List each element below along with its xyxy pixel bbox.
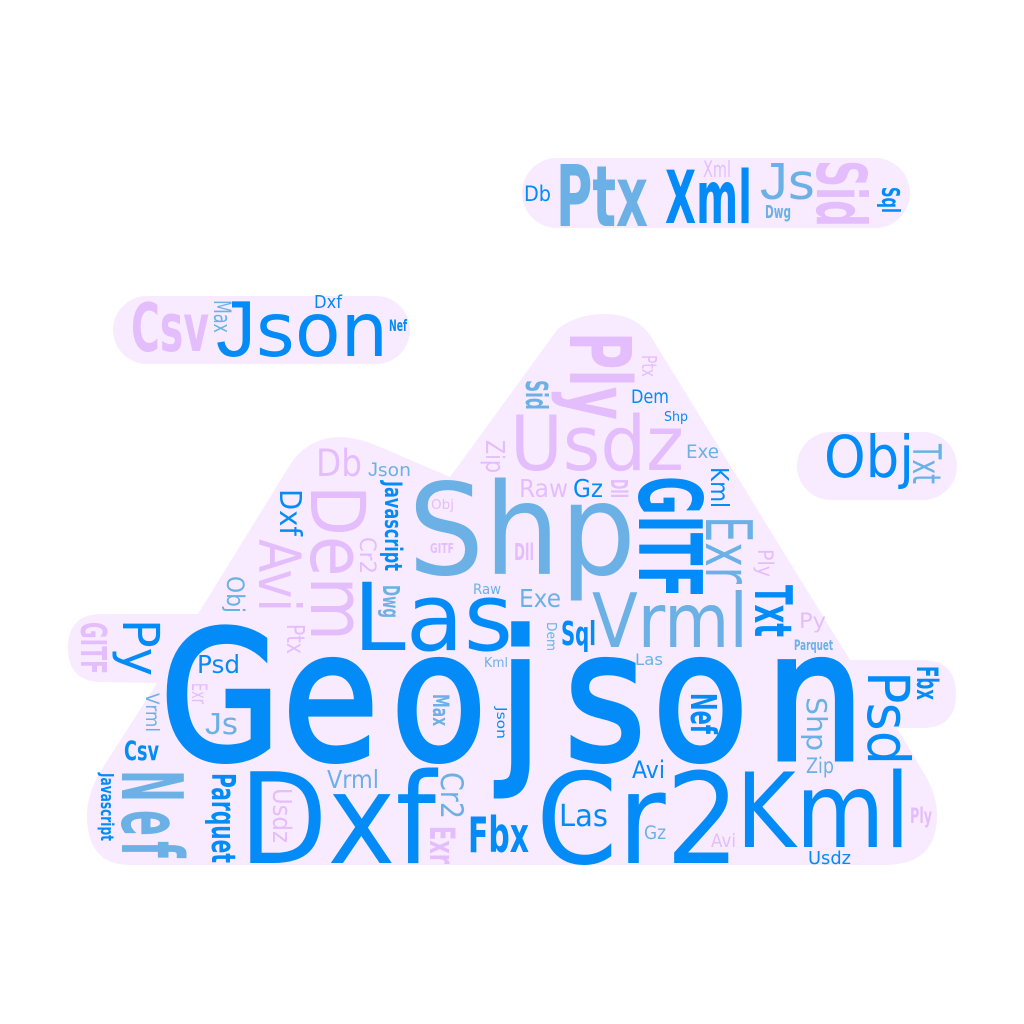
word: Geojson: Geojson [160, 595, 864, 802]
word: GITF: GITF [618, 476, 720, 598]
word: Obj: Obj [824, 423, 914, 491]
word: Shp large: Shp [408, 456, 636, 604]
word: Max: Max [427, 694, 452, 726]
word: Vrml: Vrml [327, 765, 379, 794]
word: Js: Js [760, 153, 815, 211]
word: Sql: Sql [876, 187, 905, 213]
word: Cr2: Cr2 [433, 772, 469, 819]
group: mountain upper words [408, 332, 833, 665]
word: Psd: Psd [854, 671, 922, 765]
word: Gz: Gz [644, 822, 666, 844]
word: Sid: Sid [800, 160, 880, 227]
word: Exe: Exe [686, 441, 719, 463]
word: GITF left: GITF [72, 622, 113, 674]
word: Zip: Zip [479, 440, 509, 473]
word: Las inner: Las [559, 799, 608, 834]
word: Ply: Ply [910, 804, 932, 828]
word: Shp: Shp [664, 410, 688, 425]
word: Json rotated: Json [493, 706, 508, 739]
group: right pill words [824, 423, 948, 491]
word: Psd: Psd [197, 650, 240, 679]
word: Nef: Nef [682, 693, 723, 734]
word: Dem: Dem [631, 386, 669, 408]
word: Exe lower: Exe [519, 584, 561, 613]
word: Avi: Avi [632, 756, 665, 784]
word: Fbx: Fbx [910, 666, 944, 700]
word: Dxf large: Dxf [239, 746, 438, 893]
word: Ptx: Ptx [281, 624, 310, 654]
word: Py: Py [799, 609, 826, 633]
word: Max: Max [208, 300, 236, 333]
word: Dwg: Dwg [765, 202, 791, 223]
word: Parquet: Parquet [204, 773, 243, 863]
word: Zip: Zip [806, 754, 834, 778]
word: Txt: Txt [903, 443, 948, 484]
word: Sql: Sql [561, 614, 596, 653]
word: Cr2 large: Cr2 [536, 746, 740, 893]
word: Las: Las [353, 564, 513, 673]
word: Exr: Exr [421, 826, 461, 864]
word: Raw small: Raw [473, 582, 501, 598]
word: Avi: Avi [245, 539, 313, 612]
word cloud [68, 158, 957, 865]
word: Javascript: Javascript [96, 772, 117, 841]
word: Ptx: Ptx [556, 148, 648, 247]
background: mountain mask [68, 314, 956, 865]
group: left pill words [131, 284, 408, 374]
word: Xml: Xml [665, 156, 752, 241]
word: Javascript: Javascript [379, 480, 407, 571]
word: Vrml: Vrml [592, 577, 748, 665]
word: Csv: Csv [124, 736, 159, 767]
word: Sid: Sid [518, 380, 553, 410]
background: top pill [522, 158, 910, 228]
word: Db: Db [316, 442, 362, 485]
word: Dll horizontal: Dll [514, 540, 534, 566]
word: Exr: Exr [187, 683, 211, 704]
word: Shp: Shp [800, 697, 833, 751]
word: Kml: Kml [705, 467, 734, 508]
word: Vrml: Vrml [141, 693, 163, 732]
word: Las small: Las [635, 650, 663, 669]
word: Json: Json [368, 460, 411, 481]
word: Nef: Nef [389, 316, 408, 335]
word: Dll rotated: Dll [605, 479, 631, 498]
word: Cr2: Cr2 [354, 537, 379, 574]
word: Exr: Exr [690, 516, 764, 584]
word: Dem rotated: Dem [543, 622, 558, 651]
word: Fbx: Fbx [468, 807, 529, 864]
group: mountain left words [221, 442, 513, 673]
word: Csv: Csv [131, 289, 209, 367]
word: Ply small: Ply [753, 549, 777, 577]
word: Obj: Obj [221, 576, 249, 613]
word: GITF small: GITF [430, 542, 454, 557]
word: Usdz: Usdz [266, 788, 296, 843]
group: top pill words [524, 148, 905, 247]
word: Dem large: Dem [293, 485, 382, 641]
word: Usdz: Usdz [510, 399, 684, 488]
word: Ptx small: Ptx [637, 355, 661, 377]
group: mountain lower words [80, 623, 940, 865]
word: Gz: Gz [573, 474, 603, 503]
word: Xml small: Xml [703, 158, 731, 183]
background: right pill [797, 432, 957, 500]
word: Obj small: Obj [431, 498, 454, 513]
background: left pill [113, 296, 410, 364]
word: Db: Db [524, 182, 551, 206]
word: Ply large: Ply [549, 332, 648, 420]
word: Dxf: Dxf [314, 292, 343, 313]
word: Kml small: Kml [484, 656, 508, 671]
word: Raw: Raw [519, 474, 568, 503]
word: Dwg: Dwg [377, 585, 403, 618]
word: Usdz: Usdz [808, 848, 851, 869]
word: Avi lilac: Avi [711, 830, 736, 852]
word: Dxf: Dxf [272, 489, 307, 537]
word: Nef large: Nef [101, 770, 201, 859]
word: Js: Js [205, 706, 238, 741]
word: Json: Json [216, 284, 388, 374]
word: Parquet: Parquet [794, 638, 833, 654]
word: Py left: Py [110, 619, 169, 676]
word: Kml large: Kml [736, 752, 910, 872]
word: Txt: Txt [742, 585, 802, 637]
